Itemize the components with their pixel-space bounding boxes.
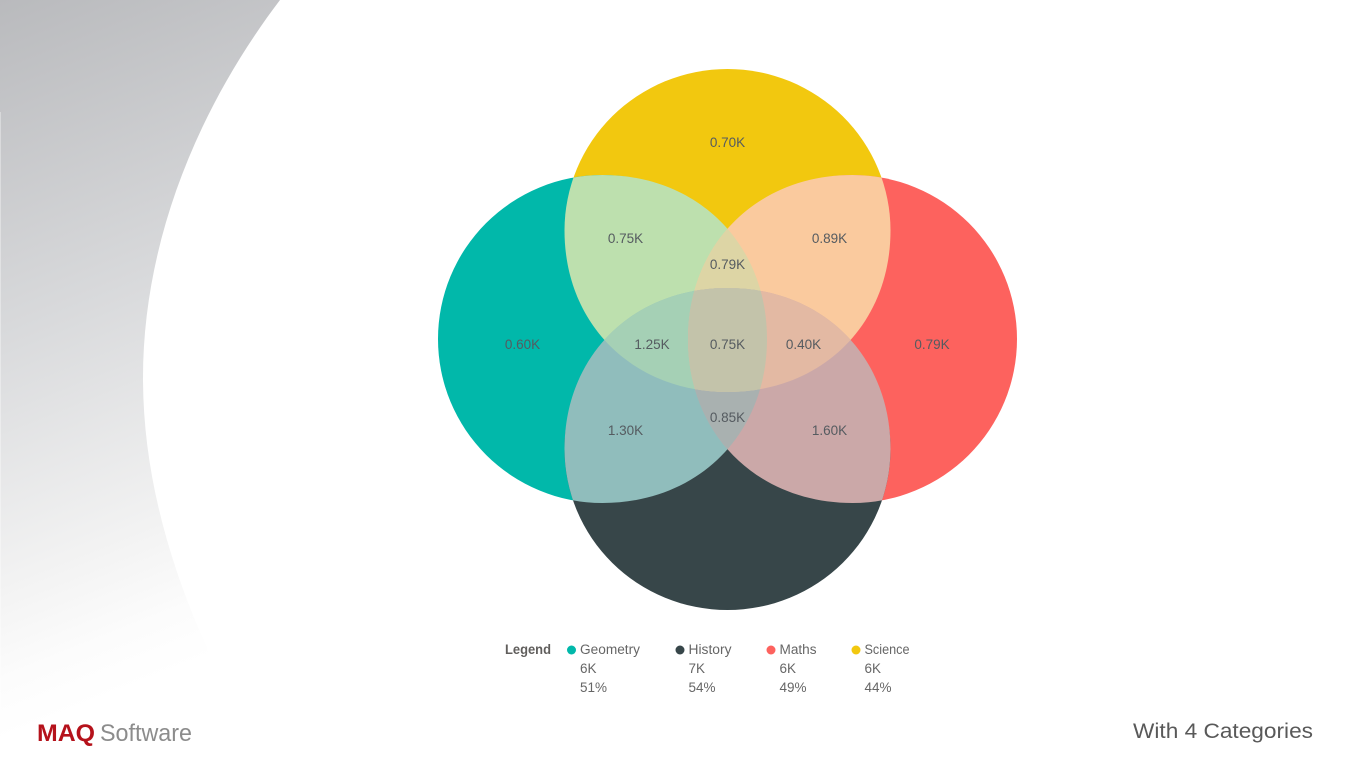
circle: History: [564, 288, 890, 610]
overlap: Geometry, Maths and Science: [694, 229, 760, 290]
legend: [505, 642, 910, 695]
value labels: 1.30K: [608, 423, 643, 438]
background swoosh: [0, 0, 280, 768]
value labels: 0.40K: [786, 337, 821, 352]
logo: MAQ Software: Software: [100, 720, 192, 747]
circle: Geometry: [438, 175, 767, 503]
logo: MAQ Software: MAQ: [37, 720, 95, 747]
legend item: Science: 6K: [864, 661, 881, 676]
circle: Maths: [688, 175, 1017, 503]
value labels: 1.25K: [634, 337, 670, 352]
legend item: Science: Science: [864, 642, 910, 657]
overlap: all four categories: [688, 288, 767, 392]
legend item: Geometry: 51%: [580, 680, 607, 695]
legend item: Science: 44%: [864, 680, 892, 695]
value labels: 0.89K: [812, 231, 847, 246]
legend item: Science: [852, 642, 910, 695]
legend item: Maths: [766, 642, 817, 695]
legend item: History: History: [688, 642, 732, 657]
logo: MAQ Software: [37, 720, 192, 747]
circle: Science: [564, 69, 890, 392]
legend item: History: 54%: [688, 680, 716, 695]
overlap: Maths and History: [695, 291, 890, 503]
value labels: 0.75K: [710, 337, 745, 352]
value labels: 0.70K: [710, 135, 745, 150]
overlap: Geometry, Science and History: [604, 291, 695, 389]
value labels: 0.75K: [608, 231, 643, 246]
value labels: 0.60K: [505, 337, 540, 352]
legend item: History: [676, 642, 732, 695]
footer caption: With 4 Categories: [1133, 719, 1313, 743]
overlap: Geometry and Science: [564, 175, 728, 340]
value labels: 0.79K: [710, 257, 745, 272]
overlap: Geometry, Maths and History: [695, 389, 760, 449]
legend item: Geometry: 6K: [580, 661, 597, 676]
overlap: Maths and Science: [694, 175, 890, 340]
legend item: Maths: Maths: [780, 642, 817, 657]
legend item: History: 7K: [688, 661, 705, 676]
legend item: Maths: 6K: [780, 661, 796, 676]
venn diagram: [438, 69, 1017, 610]
legend title: Legend: [505, 642, 551, 657]
overlap: Geometry and History: [564, 291, 728, 503]
legend item: Geometry: Geometry: [580, 642, 640, 657]
value labels: 1.60K: [812, 423, 847, 438]
value labels: [505, 135, 950, 438]
legend item: Maths: 49%: [780, 680, 807, 695]
value labels: 0.85K: [710, 410, 745, 425]
legend item: Geometry: [567, 642, 640, 695]
overlap: Maths, Science and History: [688, 288, 850, 392]
value labels: 0.79K: [914, 337, 950, 352]
